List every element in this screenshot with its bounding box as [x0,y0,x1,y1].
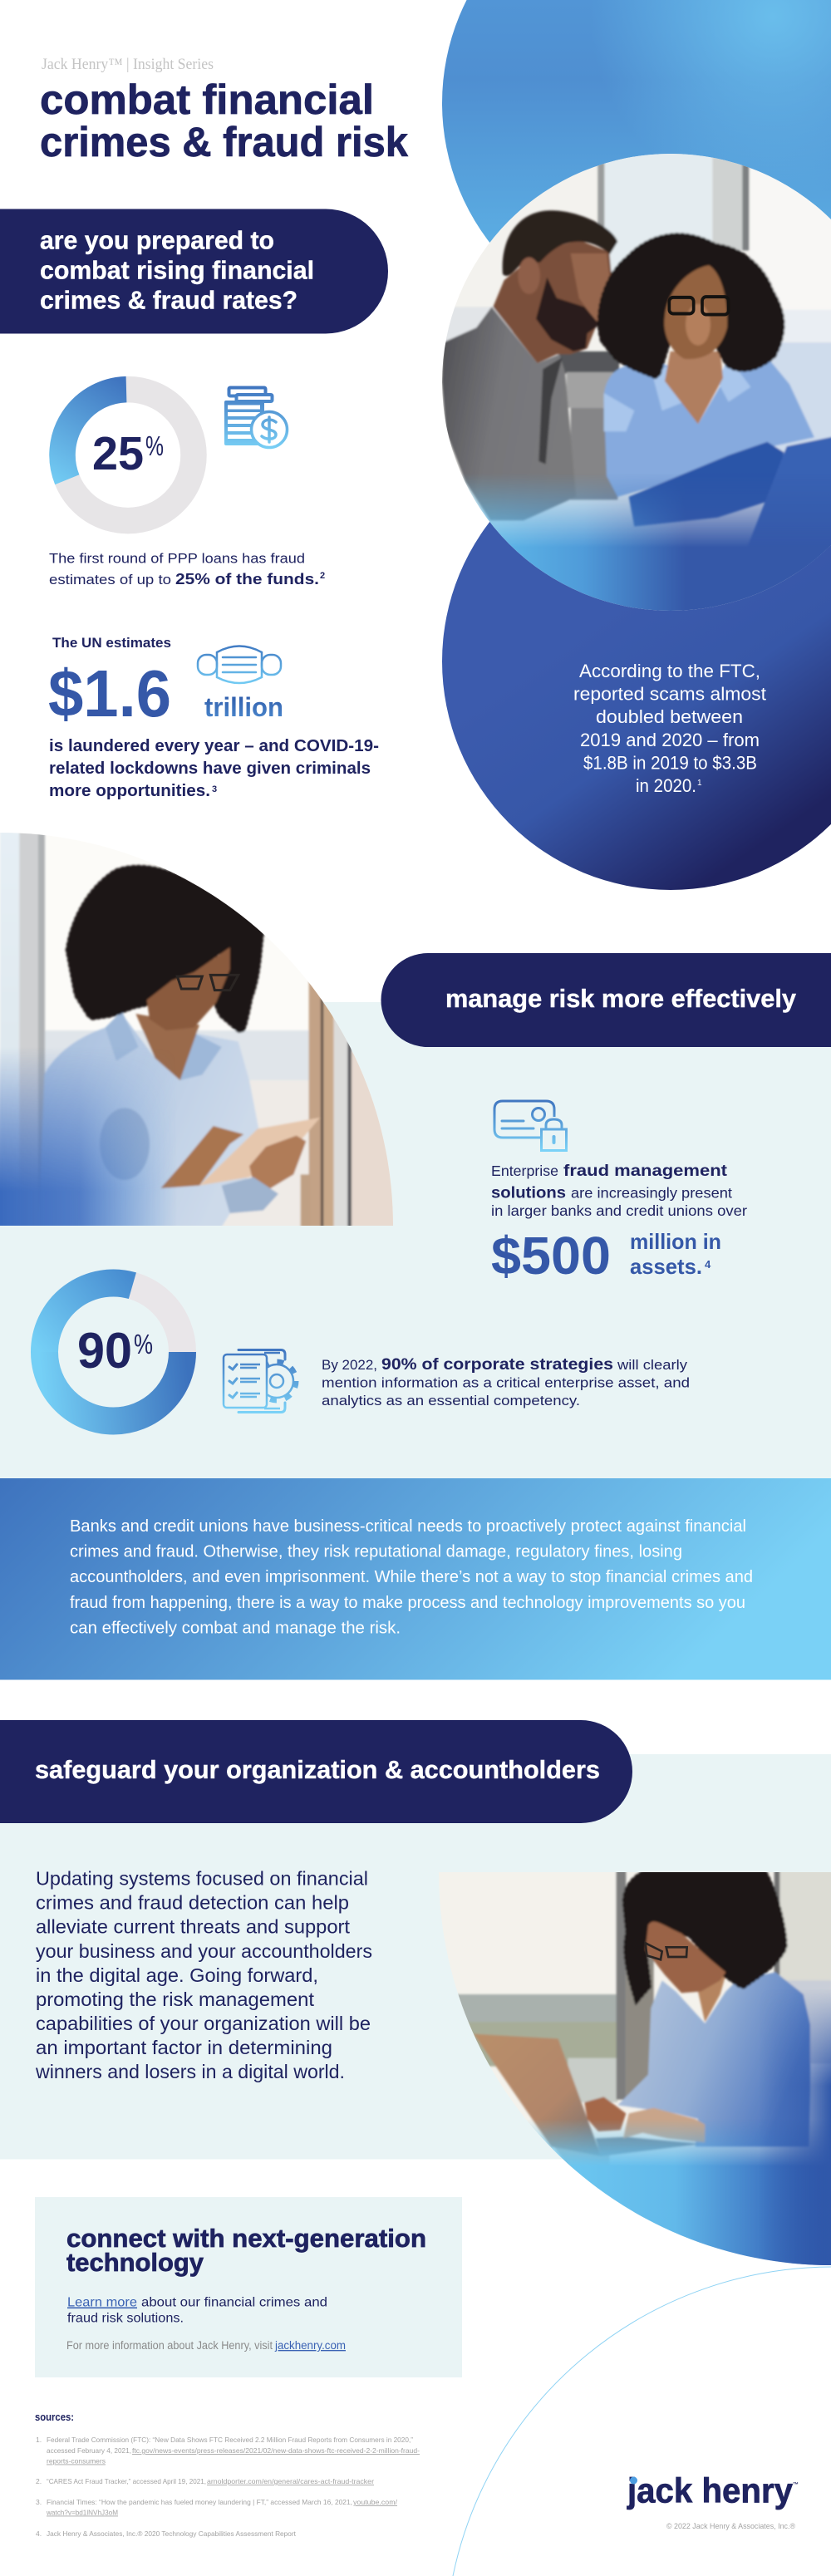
text: PPP loans fraud estimate [49,550,325,587]
text: 90% of corporate strategies: mention information as a critical enterprise asset, and [322,1374,690,1391]
donut chart: 25% [62,390,194,521]
photo: woman with tablet [0,831,399,1230]
stat: $1.6 trillion: more opportunities. [49,782,210,800]
logo: jack henry: ™ [793,2482,799,2488]
sources list: 3. [36,2498,42,2506]
panel: connect call to action: connect with next-generation [66,2224,426,2253]
sources list: 2. [36,2477,42,2485]
text: 90% of corporate strategies: By 2022, [322,1357,377,1373]
text: PPP loans fraud estimate: The first round of PPP loans has fraud [49,550,305,567]
sources list: ftc.gov/news-events/press-releases/2021/02/new-data-shows-ftc-received-2-2-million-fraud- [132,2446,420,2455]
icon: coin stack with dollar [224,387,288,447]
text: FTC reported scams: According to the FTC, [579,661,760,681]
panel: connect call to action: jackhenry.com [274,2339,346,2352]
panel: connect call to action [35,2197,462,2377]
heading pill: are you prepared: crimes & fraud rates? [40,286,297,314]
heading pill: safeguard [0,1720,632,1823]
light section background: safeguard [0,1754,831,2159]
gradient band with paragraph: crimes and fraud. Otherwise, they risk reputational damage, regulatory fines, losing [70,1542,682,1561]
text: updating systems paragraph: your business and your accountholders [36,1940,372,1962]
text: fraud management solutions: fraud management [563,1163,728,1180]
text: updating systems paragraph: winners and losers in a digital world. [35,2061,345,2082]
panel: connect call to action: fraud risk solutions. [67,2312,184,2325]
text: PPP loans fraud estimate: 25% of the funds. [175,570,319,587]
sources list: Federal Trade Commission (FTC): “New Data Shows FTC Received 2.2 Million Fraud Reports from Consumers in 2020,” [47,2436,413,2444]
copyright: © 2022 Jack Henry & Associates, Inc.® [666,2522,795,2531]
sources list: Financial Times: “How the pandemic has fueled money laundering | FT,” accessed March 16, 2021, [47,2498,352,2506]
text: FTC reported scams: 1 [697,779,702,788]
sources list: 1. [36,2436,42,2444]
upper decorative blue circle [442,0,831,332]
donut chart: 25%: 25 [92,427,144,480]
donut chart: 25%: % [145,430,164,461]
text: FTC reported scams: in 2020. [636,775,696,796]
top label: Jack Henry Insight Series: Jack Henry™ | Insight Series [42,56,214,73]
text: 90% of corporate strategies: analytics as an essential competency. [322,1393,580,1408]
donut chart: 90%: % [134,1329,153,1359]
sources list: 4. [36,2529,42,2538]
sources list [35,2411,420,2538]
title [40,76,408,165]
stat: $500 million in assets: 4 [705,1258,711,1271]
sources list: “CARES Act Fraud Tracker,” accessed April 19, 2021, [47,2477,206,2485]
text: updating systems paragraph: capabilities of your organization will be [36,2013,371,2034]
lower blue circle [442,433,831,890]
stat: $1.6 trillion: related lockdowns have given criminals [49,760,371,778]
text: updating systems paragraph: an important factor in determining [36,2037,332,2058]
heading pill: are you prepared [0,209,388,334]
donut chart: 90% [44,1283,182,1421]
photo: woman at laptop [432,1870,831,2271]
stat: $500 million in assets: million in [630,1229,721,1254]
text: FTC reported scams [573,661,766,796]
sources list: watch?v=bd1lNVhJ3oM [46,2508,118,2516]
sources list: Jack Henry & Associates, Inc.® 2020 Technology Capabilities Assessment Report [47,2529,297,2538]
stat: $1.6 trillion: $1.6 [48,656,171,730]
heading pill: are you prepared: combat rising financial [40,256,314,284]
text: updating systems paragraph: alleviate current threats and support [36,1916,351,1938]
stat: $1.6 trillion: is laundered every year – and COVID-19- [49,737,379,755]
thin decorative arc [453,2267,831,2576]
text: updating systems paragraph: Updating systems focused on financial [36,1868,368,1890]
sources list: youtube.com/ [353,2498,398,2506]
panel: connect call to action: technology [66,2248,204,2277]
text: fraud management solutions: are increasingly present [571,1185,732,1202]
text: updating systems paragraph: in the digital age. Going forward, [36,1964,318,1986]
title: combat financial [40,76,374,123]
panel: connect call to action: Learn more [67,2295,137,2310]
icon: card with padlock [494,1101,567,1150]
title: crimes & fraud risk [40,119,408,165]
heading pill: manage risk: manage risk more effectively [445,984,797,1013]
stat: $500 million in assets: $500 [491,1226,611,1286]
logo: jack henry: jack henry [627,2471,794,2510]
text: fraud management solutions: solutions [491,1185,566,1202]
donut chart: 90%: 90 [77,1323,132,1379]
text: fraud management solutions: in larger banks and credit unions over [491,1202,747,1219]
icon: checklist and gear [224,1349,296,1413]
text: FTC reported scams: reported scams almost [573,683,766,705]
photo: man and woman reviewing a laptop [440,150,831,618]
gradient band with paragraph: accountholders, and even imprisonment. While there’s not a way to stop financial crimes and [70,1568,753,1586]
heading pill: manage risk [381,953,831,1047]
stat: $500 million in assets: assets. [630,1254,702,1279]
text: FTC reported scams: 2019 and 2020 – from [580,730,760,750]
gradient band with paragraph: Banks and credit unions have business-critical needs to proactively protect against financial [70,1517,746,1536]
stat: $1.6 trillion: trillion [204,692,283,722]
stat: $1.6 trillion: 3 [212,784,217,794]
panel: connect call to action: about our financial crimes and [141,2295,327,2310]
text: 90% of corporate strategies: will clearly [617,1357,688,1373]
heading pill: are you prepared: are you prepared to [40,226,274,254]
panel: connect call to action: For more information about Jack Henry, visit [66,2339,273,2352]
text: PPP loans fraud estimate: estimates of up to [49,572,171,587]
gradient band with paragraph: fraud from happening, there is a way to make process and technology improvements so you [70,1594,745,1612]
icon: face mask [198,646,281,683]
text: FTC reported scams: $1.8B in 2019 to $3.3B [583,753,757,773]
text: FTC reported scams: doubled between [596,706,743,727]
text: PPP loans fraud estimate: 2 [320,571,325,581]
sources list: sources: [35,2411,74,2423]
stat: $1.6 trillion [48,636,379,800]
stat: $500 million in assets [491,1226,721,1286]
text: 90% of corporate strategies: 90% of corporate strategies [381,1356,613,1374]
sources list: accessed February 4, 2021, [47,2446,131,2455]
sources list: reports-consumers [47,2456,106,2465]
gradient band with paragraph: can effectively combat and manage the risk. [70,1619,401,1637]
text: updating systems paragraph: crimes and fraud detection can help [36,1891,349,1913]
stat: $1.6 trillion: The UN estimates [52,636,171,651]
gradient band with paragraph [0,1478,831,1680]
text: updating systems paragraph [35,1868,372,2082]
text: 90% of corporate strategies [322,1356,690,1408]
text: fraud management solutions: Enterprise [491,1163,558,1179]
light section background: manage risk [0,1002,831,1478]
text: fraud management solutions [491,1163,747,1219]
heading pill: safeguard: safeguard your organization & accountholders [35,1755,600,1784]
sources list: arnoldporter.com/en/general/cares-act-fraud-tracker [207,2477,374,2485]
text: updating systems paragraph: promoting the risk management [36,1989,315,2010]
